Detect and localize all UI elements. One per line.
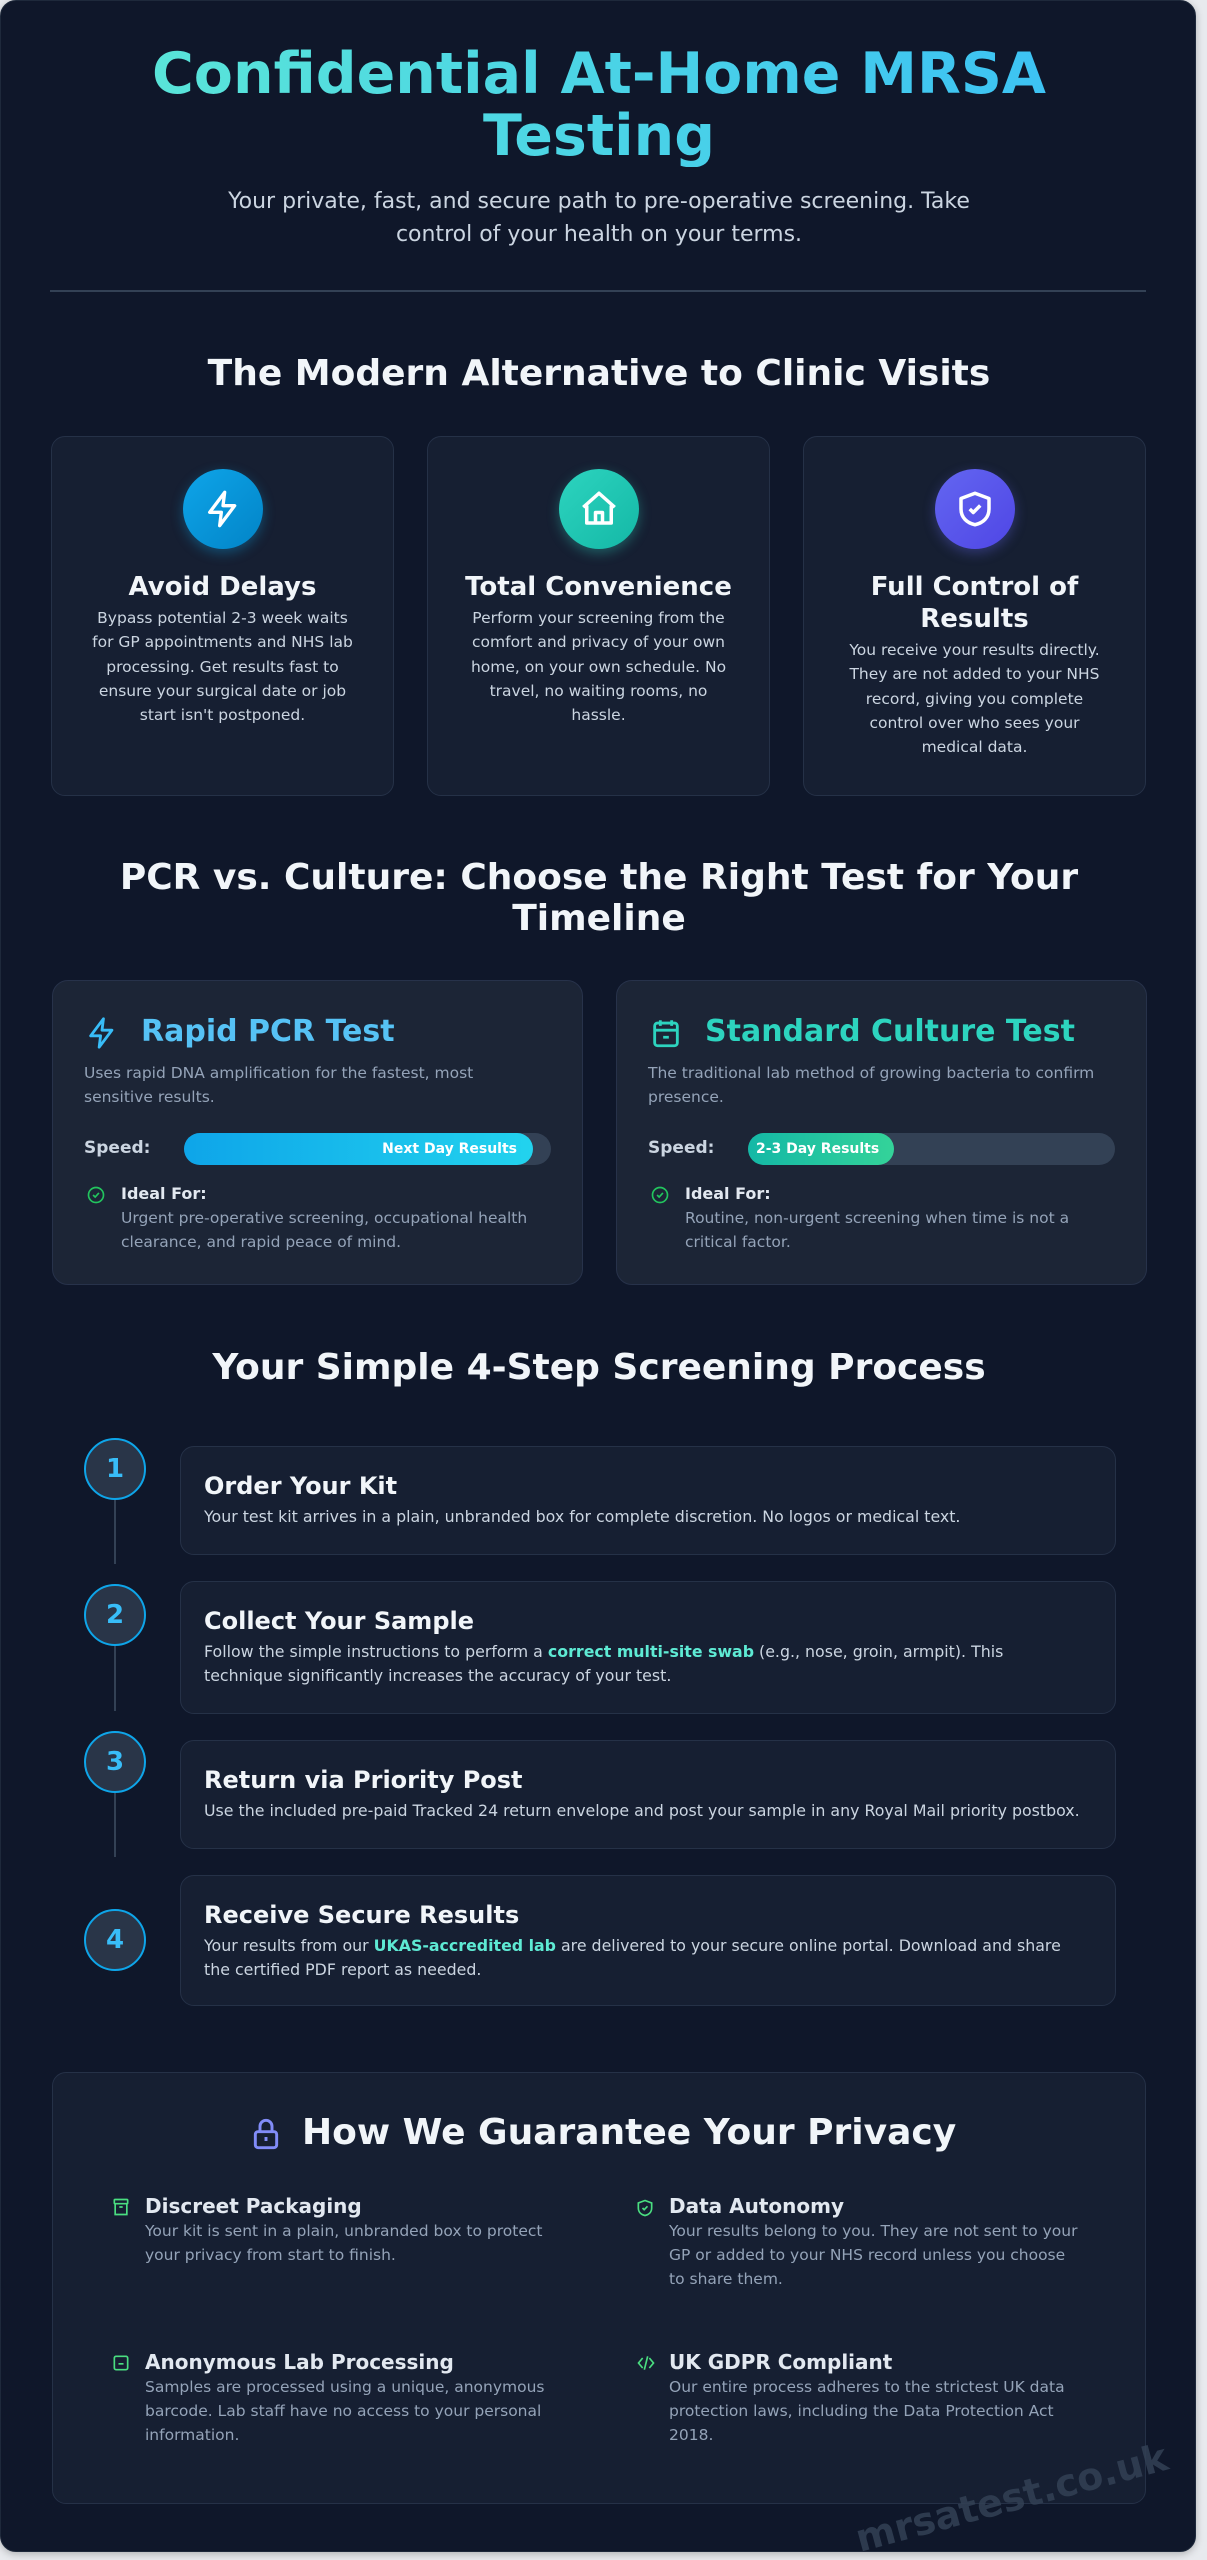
step 2 card: Collect Your Sample [204,1607,474,1635]
ideal for: Routine, non-urgent screening when time is not a critical factor. [685,1209,1069,1251]
description: sensitive results. [84,1088,215,1106]
icon: calendar [653,1020,679,1048]
speed bar [184,1133,551,1165]
label: Speed: [648,1138,714,1158]
step 2 card: technique significantly increases the accuracy of your test. [204,1666,671,1685]
step 1 number [84,1438,146,1500]
step 1 card [180,1446,1116,1555]
step 2 card [180,1581,1116,1714]
step 1 card: Your test kit arrives in a plain, unbranded box for complete discretion. No logos or medical text. [204,1507,960,1526]
item: anonymous lab: Anonymous Lab Processing [145,2350,454,2374]
step 3 card: Use the included pre-paid Tracked 24 return envelope and post your sample in any Royal Mail priority postbox. [204,1801,1080,1820]
item: anonymous lab [114,2350,544,2444]
icon: home [558,469,638,549]
ideal for: Ideal For: [121,1184,207,1203]
text: Perform your screening from the comfort and privacy of your own home, on your own schedule. No travel, no waiting rooms, no hassle. [471,609,726,724]
heading: pcr vs culture [120,857,1078,939]
icon: lightning [89,1017,114,1049]
heading: steps: Your Simple 4-Step Screening Process [212,1347,986,1388]
heading: pcr vs culture: Timeline [512,898,686,939]
text: You receive your results directly. They are not added to your NHS record, giving you complete control over who sees your medical data. [849,641,1100,756]
description: Uses rapid DNA amplification for the fastest, most [84,1064,473,1082]
step 1 number: 1 [106,1454,124,1484]
heading: Avoid Delays [129,572,316,602]
text: Bypass potential 2-3 week waits for GP appointments and NHS lab processing. Get results fast to ensure your surgical date or job start isn't postponed. [92,609,353,724]
step 3 card: Return via Priority Post [204,1766,523,1794]
step 2 card: Follow the simple instructions to perform a correct multi-site swab (e.g., nose, groin, armpit). This [204,1642,1003,1661]
panel: privacy [52,2072,1146,2504]
item: gdpr: UK GDPR Compliant [669,2350,892,2374]
description: The traditional lab method of growing bacteria to confirm [648,1064,1094,1082]
label: Speed: [84,1138,150,1158]
step 3 number [84,1731,146,1793]
step 3 card [180,1740,1116,1849]
item: anonymous lab: Samples are processed using a unique, anonymous barcode. Lab staff have no access to your personal information. [145,2378,544,2444]
step 4 card: Your results from our UKAS-accredited lab are delivered to your secure online portal. Download and share the certified PDF report as needed. [204,1936,1061,1979]
item: discreet packaging: Discreet Packaging [145,2194,362,2218]
item: data autonomy [638,2194,1078,2288]
heading: pcr vs culture: PCR vs. Culture: Choose the Right Test for Your [120,857,1078,898]
panel: control [803,436,1146,796]
icon: check [652,1186,668,1204]
item: discreet packaging [114,2194,542,2264]
icon: lock [254,2118,278,2150]
step 4 card [180,1875,1116,2006]
heading: How We Guarantee Your Privacy [302,2112,956,2153]
title [1,43,1197,167]
panel: culture [616,980,1147,1285]
title: Testing [483,103,715,169]
item: data autonomy: Data Autonomy [669,2194,844,2218]
icon: lightning [182,469,262,549]
panel: convenience [427,436,770,796]
panel: avoid delays [51,436,394,796]
step 4 number: 4 [106,1925,124,1955]
icon: check [88,1186,104,1204]
ideal for: Urgent pre-operative screening, occupational health clearance, and rapid peace of mind. [121,1209,527,1251]
step 2 number: 2 [106,1600,124,1630]
description [648,1064,1094,1106]
ideal for [121,1184,527,1251]
icon: shield [934,469,1014,549]
step 4 card: Receive Secure Results [204,1901,519,1929]
title: Standard Culture Test [705,1014,1075,1049]
description: presence. [648,1088,724,1106]
step 1 card: Order Your Kit [204,1472,397,1500]
item: gdpr [638,2350,1065,2444]
step 2 number [84,1584,146,1646]
description [84,1064,473,1106]
title: Rapid PCR Test [141,1014,395,1049]
heading: modern alternative: The Modern Alternative to Clinic Visits [208,353,990,394]
item: discreet packaging: Your kit is sent in a plain, unbranded box to protect your privacy from start to finish. [145,2222,542,2264]
item: data autonomy: Your results belong to you. They are not sent to your GP or added to your NHS record unless you choose to share them. [669,2222,1077,2288]
heading: Full Control of Results [871,572,1078,634]
ideal for [685,1184,1069,1251]
heading: Total Convenience [465,572,732,602]
ideal for: Ideal For: [685,1184,771,1203]
title: Confidential At-Home MRSA [152,41,1046,107]
speed bar: 2-3 Day Results [756,1141,879,1157]
step 4 number [84,1909,146,1971]
speed bar [748,1133,1115,1165]
item: gdpr: Our entire process adheres to the strictest UK data protection laws, including the Data Protection Act 2018. [669,2378,1065,2444]
speed bar: Next Day Results [382,1141,517,1157]
subtitle: Your private, fast, and secure path to pre-operative screening. Take control of your health on your terms. [228,189,970,247]
step 3 number: 3 [106,1747,124,1777]
panel: PCR [52,980,583,1285]
